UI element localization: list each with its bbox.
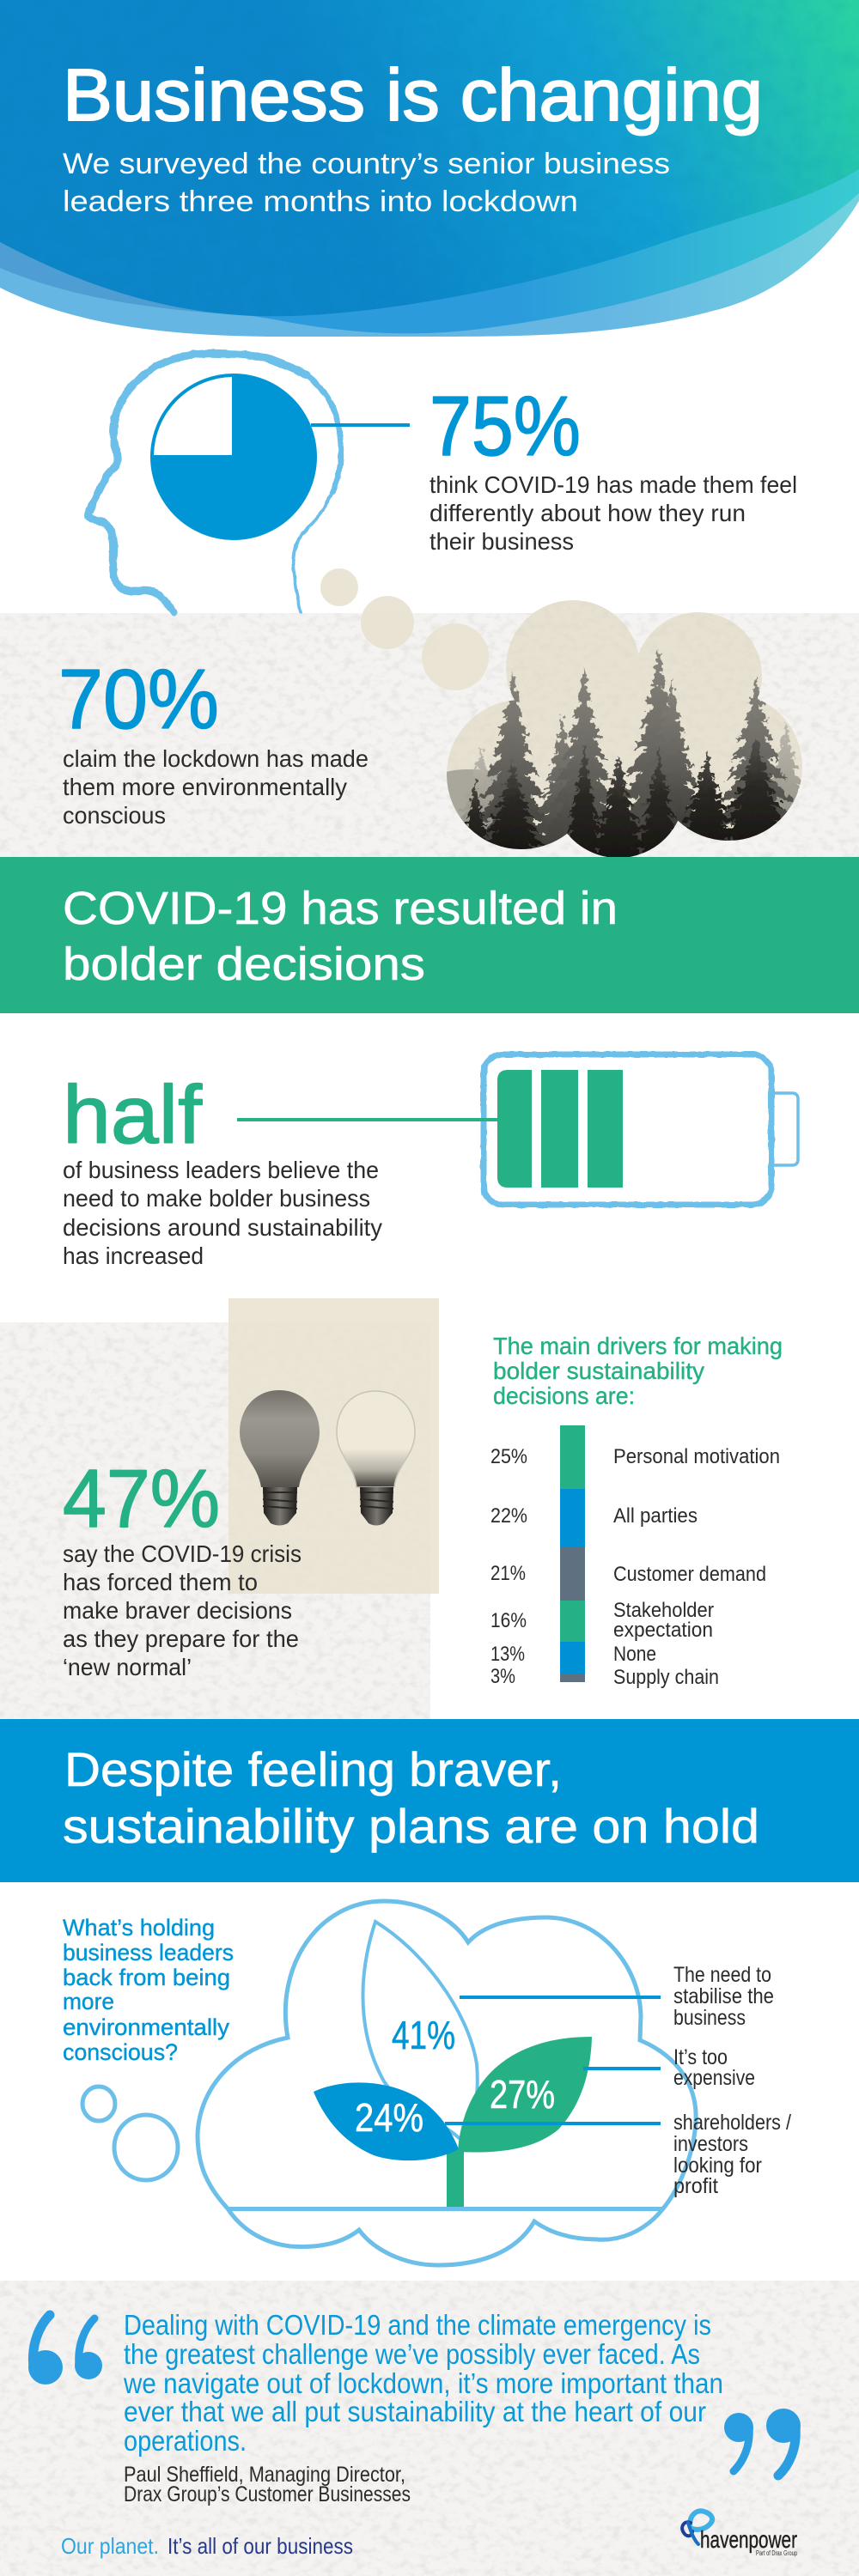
beige panel	[228, 1298, 439, 1594]
description	[63, 1540, 302, 1680]
value 27%: 27%	[490, 2072, 555, 2117]
icon: opening quote mark	[28, 2315, 102, 2385]
icon: closing quote mark	[724, 2409, 801, 2476]
head outline	[88, 354, 341, 612]
description: their business	[430, 528, 574, 555]
mist trees	[459, 721, 801, 848]
footer tagline	[61, 2533, 353, 2559]
description: ‘new normal’	[63, 1654, 192, 1680]
stat: half	[63, 1069, 382, 1269]
heading: COVID-19 has resulted in	[63, 883, 618, 934]
wave: middle layer	[0, 0, 859, 333]
chart heading: bolder sustainability	[493, 1358, 704, 1384]
heading: Despite feeling braver,	[64, 1742, 562, 1796]
quote text	[123, 2309, 723, 2457]
chart heading: decisions are:	[493, 1382, 635, 1409]
stat: 47%	[63, 1453, 302, 1680]
mist band	[447, 769, 533, 849]
plant labels: expensive	[673, 2066, 755, 2090]
image: forest cloud	[438, 592, 822, 872]
description: claim the lockdown has made	[63, 745, 369, 772]
description	[430, 471, 797, 555]
ground line	[228, 2207, 663, 2211]
bar labels: Supply chain	[613, 1666, 719, 1689]
value 41%: 41%	[392, 2013, 455, 2057]
logo strapline: Part of Drax Group	[756, 2549, 797, 2557]
quote text: operations.	[124, 2425, 247, 2457]
plant labels: stabilise the	[673, 1984, 774, 2008]
wave: front layer	[0, 0, 859, 316]
quote text: the greatest challenge we’ve possibly ever faced. As	[124, 2338, 700, 2370]
percentages	[490, 1445, 527, 1688]
bar labels: Personal motivation	[613, 1445, 780, 1468]
question text: business leaders	[63, 1940, 234, 1965]
plant labels	[673, 1963, 791, 2198]
description: has forced them to	[63, 1569, 258, 1595]
question text: environmentally	[63, 2014, 230, 2040]
description: make braver decisions	[63, 1597, 292, 1624]
question text: conscious?	[63, 2039, 178, 2065]
plant labels: It’s too	[673, 2045, 728, 2069]
section banner: bolder decisions	[0, 857, 859, 1013]
bar labels	[613, 1445, 780, 1689]
description: conscious	[63, 802, 166, 829]
cloud outline	[198, 1901, 696, 2265]
stem	[447, 2149, 464, 2207]
logo wordmark: havenpower	[700, 2526, 797, 2553]
icon: outline thought bubbles	[82, 2087, 178, 2180]
quote text: ever that we all put sustainability at the heart of our	[124, 2396, 706, 2427]
connector line	[311, 423, 410, 427]
leaf blue 24%	[314, 2082, 459, 2160]
icon: battery	[237, 1054, 798, 1205]
number: 75%	[430, 379, 581, 473]
logo mark	[682, 2511, 712, 2544]
description: need to make bolder business	[63, 1185, 370, 1212]
question text: more	[63, 1989, 114, 2014]
percentages: 13%	[490, 1643, 525, 1666]
description: differently about how they run	[430, 500, 746, 526]
plant labels: looking for	[673, 2154, 762, 2178]
chart heading	[493, 1333, 783, 1409]
panel: 47% paper background	[0, 1322, 430, 1719]
bar labels: Stakeholder	[613, 1599, 714, 1622]
dark bulb	[240, 1390, 320, 1525]
quote attribution	[124, 2463, 411, 2506]
stacked bar	[560, 1425, 585, 1682]
value 24%: 24%	[355, 2095, 423, 2140]
description	[63, 745, 369, 829]
footer tagline: It’s all of our business	[168, 2533, 353, 2559]
header banner	[0, 0, 859, 337]
subtitle: We surveyed the country’s senior business	[63, 148, 670, 180]
description: as they prepare for the	[63, 1625, 299, 1652]
percentages: 16%	[490, 1609, 527, 1632]
description	[63, 1157, 382, 1269]
title: Business is changing	[63, 55, 763, 137]
quote attribution: Paul Sheffield, Managing Director,	[124, 2463, 405, 2487]
heading: sustainability plans are on hold	[63, 1799, 759, 1853]
description: say the COVID-19 crisis	[63, 1540, 302, 1567]
quote attribution: Drax Group’s Customer Businesses	[124, 2482, 411, 2506]
percentages: 3%	[490, 1665, 515, 1688]
battery outline	[484, 1054, 771, 1205]
pie chart	[150, 374, 317, 540]
number: half	[63, 1069, 202, 1161]
subtitle: leaders three months into lockdown	[63, 185, 578, 218]
logo: haven power	[682, 2511, 797, 2557]
question text: What’s holding	[63, 1915, 215, 1941]
dark trees	[464, 738, 783, 857]
bar labels: All parties	[613, 1504, 698, 1528]
wave: left shadow band	[0, 242, 258, 316]
light bulb	[337, 1391, 415, 1525]
plant labels: business	[673, 2006, 746, 2030]
description: of business leaders believe the	[63, 1157, 379, 1183]
leader lines	[445, 1996, 661, 2125]
subtitle	[63, 148, 670, 218]
leaf green 27%	[458, 2037, 592, 2153]
chart: main drivers	[490, 1333, 783, 1689]
quote text: Dealing with COVID-19 and the climate emergency is	[124, 2309, 711, 2341]
stat: 75%	[430, 379, 797, 555]
panel: 70% paper background	[0, 613, 859, 857]
percentages: 21%	[490, 1562, 526, 1585]
chart: plant in cloud	[198, 1901, 696, 2265]
description: them more environmentally	[63, 774, 347, 800]
plant labels: investors	[673, 2132, 748, 2156]
battery bars	[497, 1070, 623, 1188]
heading	[63, 1742, 759, 1853]
bar labels: Customer demand	[613, 1563, 766, 1586]
heading	[63, 883, 618, 990]
percentages: 25%	[490, 1445, 527, 1468]
leaf outline 41%	[362, 1922, 478, 2145]
footer tagline: Our planet.	[61, 2533, 159, 2559]
chart heading: The main drivers for making	[493, 1333, 783, 1359]
icon: head with pie chart	[88, 354, 410, 612]
connector line	[237, 1118, 498, 1121]
question text	[63, 1915, 234, 2065]
plant labels: The need to	[673, 1963, 771, 1987]
pie quarter	[154, 377, 232, 455]
bar labels: None	[613, 1643, 656, 1666]
icon: thought bubbles	[320, 568, 489, 690]
header texture	[844, 58, 856, 64]
description: decisions around sustainability	[63, 1214, 382, 1241]
stat: 70%	[58, 652, 369, 829]
quote text: we navigate out of lockdown, it’s more important than	[123, 2367, 723, 2399]
plant labels: shareholders /	[673, 2111, 791, 2135]
gray trees	[471, 650, 805, 865]
heading: bolder decisions	[63, 939, 425, 990]
plant labels: profit	[673, 2174, 718, 2198]
number: 47%	[63, 1453, 220, 1545]
description: think COVID-19 has made them feel	[430, 471, 797, 498]
panel: quote paper background	[0, 2281, 859, 2576]
number: 70%	[58, 652, 219, 746]
question text: back from being	[63, 1965, 230, 1990]
bar labels: expectation	[613, 1619, 713, 1642]
description: has increased	[63, 1242, 204, 1269]
battery terminal	[771, 1093, 798, 1165]
wave: back layer	[0, 0, 859, 337]
percentages: 22%	[490, 1504, 527, 1528]
section banner: plans on hold	[0, 1719, 859, 1882]
image: light bulbs	[228, 1298, 439, 1594]
